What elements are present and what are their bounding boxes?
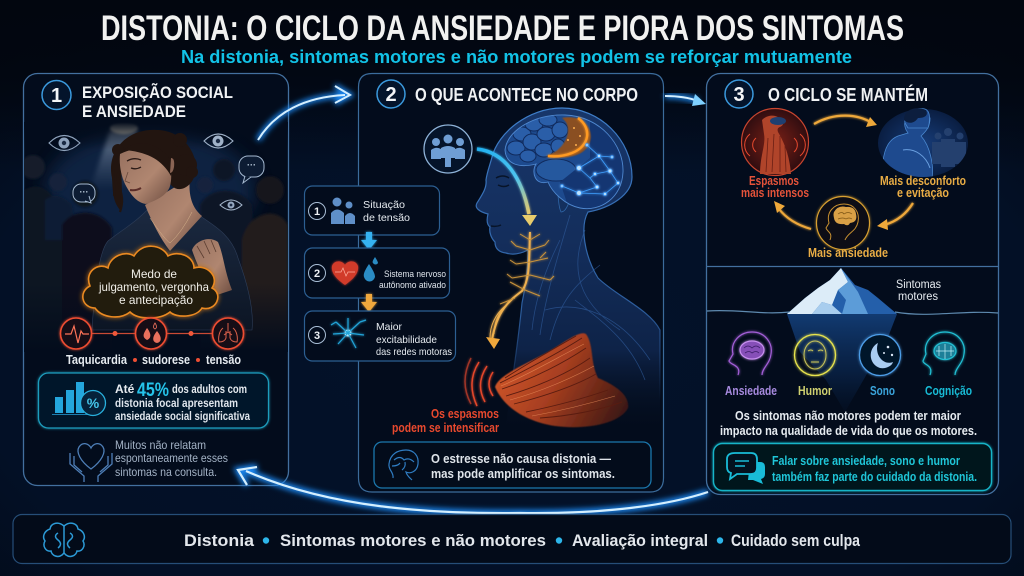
arrowhead left	[774, 201, 785, 213]
non-motor impact text: Os sintomas não motores podem ter maior	[735, 408, 961, 423]
neural network nodes	[561, 144, 620, 196]
step 2 box: autônomo ativado	[379, 280, 446, 291]
woman's hair	[111, 130, 198, 210]
step 1 box	[304, 186, 440, 235]
number badge 3	[725, 80, 753, 108]
keyword text	[184, 531, 860, 550]
panel 1 heading: E ANSIEDADE	[82, 102, 186, 121]
icon: eye small	[220, 200, 242, 210]
panel 2: o que acontece no corpo	[358, 74, 664, 492]
stress signal arrow	[477, 149, 537, 226]
non-motor labels	[725, 383, 972, 398]
icon: speech bubble right: ···	[247, 160, 256, 170]
nerve tree	[490, 232, 554, 340]
icon: speech bubble right	[239, 156, 264, 183]
number badge 3: 3	[733, 84, 745, 106]
motor symptoms label: Sintomas	[896, 279, 941, 291]
arrowhead top	[866, 117, 877, 127]
arrow: panel 3 back to panel 1	[238, 467, 708, 513]
arrow: panel 2 to panel 3	[665, 94, 706, 106]
cycle label: spasms: Espasmos	[749, 173, 799, 188]
panel 2 heading: O QUE ACONTECE NO CORPO	[415, 85, 638, 105]
icon: eye left	[49, 136, 80, 150]
key message box	[374, 442, 651, 488]
step 3 box: das redes motoras	[376, 346, 452, 358]
neck and torso nerve texture	[532, 215, 650, 380]
cycle label: spasms	[741, 173, 809, 200]
cycle label: discomfort	[880, 173, 966, 200]
step 2 box: 2	[314, 268, 320, 280]
step 3 box: Maior	[376, 321, 402, 333]
statistic text: 45%	[137, 380, 169, 401]
panel 2 frame	[358, 74, 664, 492]
icon: sweat drops	[136, 318, 166, 349]
downward arrowhead	[486, 337, 500, 349]
icon: brain outline	[44, 523, 84, 556]
keyword separators	[263, 537, 723, 544]
cycle node: spasms	[742, 108, 808, 176]
note text: Muitos não relatam	[115, 438, 206, 452]
icon: eye right	[204, 134, 233, 148]
iceberg underwater	[787, 314, 897, 412]
step 2 box: Sistema nervoso	[384, 269, 446, 280]
icon: chat bubbles	[727, 453, 765, 484]
ear	[557, 181, 570, 212]
non-motor labels: Cognição	[925, 383, 972, 398]
body silhouette	[476, 108, 660, 430]
step 1 box: de tensão	[363, 212, 410, 224]
arrow step 2 to 3	[361, 294, 377, 312]
spasm caption: Os espasmos	[431, 407, 499, 421]
waterline	[707, 311, 998, 314]
statistic text: distonia focal apresentam	[115, 396, 238, 410]
woman's shirt	[92, 210, 252, 330]
fear cloud: Medo de	[131, 267, 177, 281]
step 3 box: excitabilidade	[376, 334, 437, 346]
spasm waves	[465, 358, 493, 406]
flow steps	[304, 186, 456, 361]
section divider	[707, 266, 998, 268]
cycle label: anxiety: Mais ansiedade	[808, 245, 888, 260]
cycle arrow: right	[884, 203, 913, 225]
non-motor impact text	[720, 408, 977, 438]
icon: speech bubble left	[73, 184, 95, 203]
icon: heartbeat	[60, 318, 92, 349]
icon: heart in hands	[70, 444, 112, 482]
iceberg	[707, 268, 998, 412]
fear cloud: julgamento, vergonha	[98, 280, 209, 294]
statistic text: ansiedade social significativa	[115, 409, 250, 423]
spasm caption	[392, 407, 499, 435]
non-motor impact text: impacto na qualidade de vida do que os motores.	[720, 423, 977, 438]
woman's neck and chest	[145, 178, 202, 251]
number badge 1	[42, 80, 71, 110]
fear cloud: e antecipação	[119, 293, 193, 307]
panel 3: o ciclo se mantém	[706, 74, 998, 494]
callout text: Falar sobre ansiedade, sono e humor	[772, 454, 960, 468]
non-motor labels: Sono	[870, 383, 895, 398]
face shading	[491, 176, 509, 226]
icon: bar chart with percent: %	[87, 395, 100, 411]
non-motor labels: Humor	[798, 383, 832, 398]
icon: brain head	[389, 450, 418, 480]
keyword text: Cuidado sem culpa	[731, 531, 860, 550]
spasm caption: podem se intensificar	[392, 421, 499, 435]
step 1 box: 1	[314, 206, 320, 218]
brain	[505, 114, 630, 212]
icon: anxiety head	[729, 332, 771, 375]
cycle node: anxiety	[816, 196, 870, 250]
number badge 1: 1	[51, 85, 62, 107]
keyword text: Avaliação integral	[572, 531, 708, 550]
number badge 2: 2	[385, 84, 397, 106]
head and body illustration	[424, 108, 660, 430]
cycle label: discomfort: Mais desconforto	[880, 173, 966, 188]
symptom labels	[66, 352, 241, 367]
note text	[115, 438, 228, 479]
icon: bar chart with percent	[52, 382, 106, 416]
panel 1: exposição social e ansiedade	[21, 74, 288, 486]
message text: O estresse não causa distonia —	[431, 451, 611, 466]
icon: people circle	[424, 125, 472, 173]
panel 1 frame	[24, 74, 288, 486]
statistic text: dos adultos com	[172, 382, 247, 396]
motor cortex glow	[546, 117, 591, 157]
panel 3 heading: O CICLO SE MANTÉM	[768, 84, 928, 105]
care callout	[714, 444, 992, 490]
note text: sintomas na consulta.	[115, 465, 217, 479]
step 3 box	[304, 311, 456, 361]
keyword text: Distonia	[184, 531, 255, 550]
step 2 box	[304, 248, 450, 298]
step 1 box: Situação	[363, 199, 405, 211]
motor symptoms label	[896, 279, 941, 303]
icon: sleep moon	[860, 334, 900, 376]
statistic text: Até	[115, 382, 135, 396]
symptom labels: Taquicardia	[66, 352, 128, 367]
step 3 box: 3	[314, 330, 320, 342]
icon: speech bubble left: ···	[80, 187, 88, 197]
woman's hand	[192, 239, 232, 296]
illustration: woman among the crowd	[21, 122, 288, 352]
bottom keywords bar	[13, 514, 1011, 564]
icon: cognition head	[923, 332, 964, 375]
cycle label: spasms: mais intensos	[741, 185, 809, 200]
symptom labels: sudorese	[142, 352, 190, 367]
panel 3 frame	[706, 74, 998, 494]
symptom labels: tensão	[206, 352, 241, 367]
callout text	[772, 454, 977, 484]
non-motor labels: Ansiedade	[725, 383, 777, 398]
fear cloud	[83, 246, 218, 318]
arrowhead right	[877, 219, 888, 230]
statistic callout	[38, 373, 268, 428]
number badge 2	[377, 80, 405, 108]
keyword text: Sintomas motores e não motores	[280, 531, 546, 550]
arrow: panel 1 to panel 2	[258, 86, 350, 140]
cycle node: discomfort	[878, 108, 968, 178]
symptom icons row	[60, 318, 244, 349]
motor symptoms label: motores	[898, 291, 938, 303]
callout text: também faz parte do cuidado da distonia.	[772, 470, 977, 484]
cycle arrow: left	[779, 209, 811, 229]
statistic text	[115, 380, 250, 423]
icon: mood face	[794, 334, 836, 376]
woman's face	[120, 148, 171, 204]
panel 1 heading: EXPOSIÇÃO SOCIAL	[82, 82, 233, 102]
iceberg tip	[787, 268, 897, 314]
message text	[431, 451, 615, 481]
note text: espontaneamente esses	[115, 451, 228, 465]
cycle arrow: top	[814, 116, 872, 124]
panel 1 heading	[82, 82, 233, 121]
arrow step 1 to 2	[361, 232, 377, 250]
cycle label: discomfort: e evitação	[897, 185, 949, 200]
trapezius muscle	[495, 333, 628, 427]
icon: lungs	[212, 318, 244, 349]
subtitle: Na distonia, sintomas motores e não motores podem se reforçar mutuamente	[181, 47, 852, 67]
message text: mas pode amplificar os sintomas.	[431, 466, 615, 481]
